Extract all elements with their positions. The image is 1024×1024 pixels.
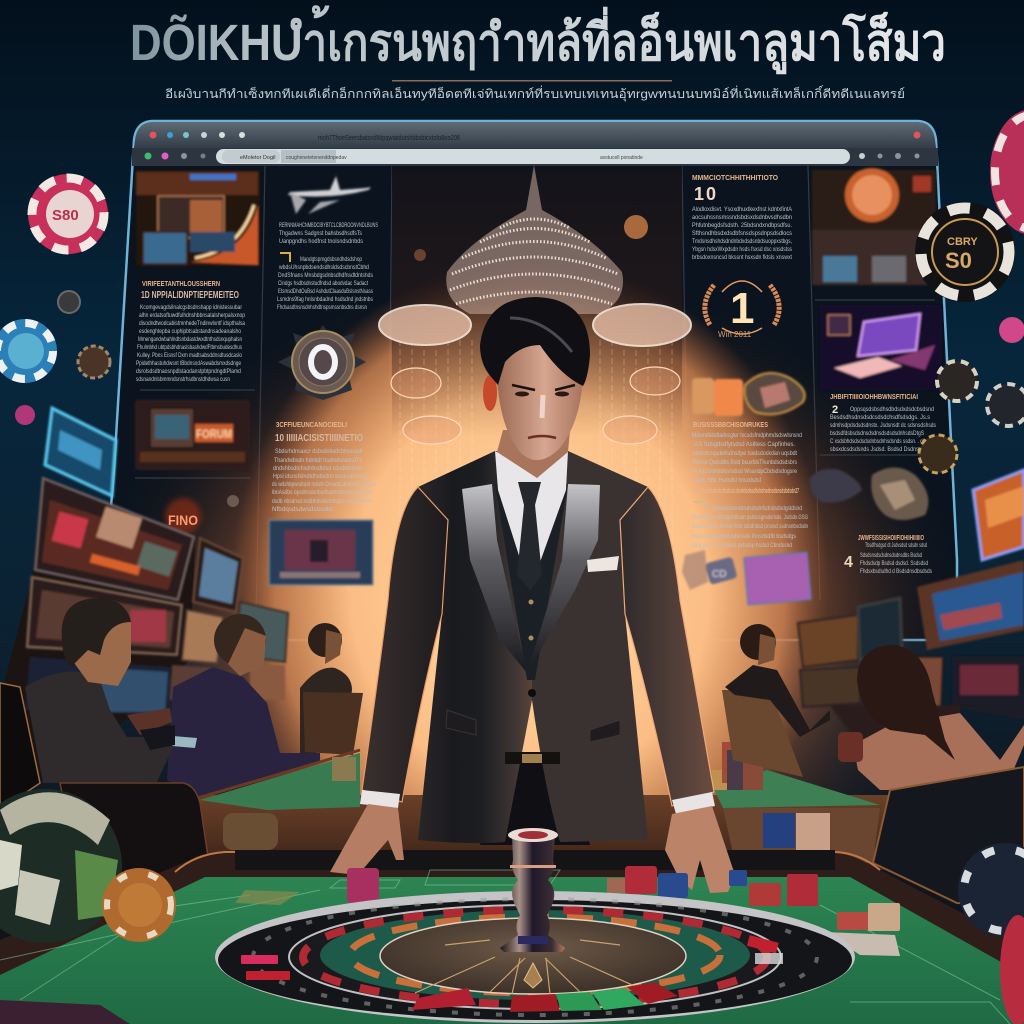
dealer face: [497, 330, 583, 460]
wheel disc spokes: [415, 940, 650, 994]
slot screen small: [193, 538, 243, 612]
subtitle: อีเผงิบานกีทำเซ็งทกทีเผเดีเดี่กอ็กกกทิลเอ็นทyทีอ็ดตทีเจ่ทินเทกท์ที่รบเทบเทเทนอุ้ทrgwทนบนบทมิอ์ที่เนิทแส้เทล็เกกิ์ดีทดีเนแลทรย์: [165, 85, 905, 102]
address tabs: coughnnetetonenddnpedav: [286, 155, 347, 161]
chip: black and white: CBRY: [947, 236, 978, 248]
chip: bottom right blue: [958, 843, 1024, 937]
text block: left article: esdenghtepba cuphipbtsabstandnsadeanalsho: [139, 329, 242, 335]
dealer belt: [505, 752, 560, 764]
chair third man: [303, 692, 363, 755]
wheel cone: [320, 910, 750, 1000]
text block: plane article: Mandgtsprngdsbsndhdsdshop: [300, 257, 363, 263]
chandelier crystal strands: [450, 219, 620, 304]
icon: award number one: [705, 281, 779, 339]
text block: fourth article: Besdsdhsdnsdsdcsdsdchsdfsdsdgs. Js.s: [830, 415, 930, 421]
text block: left article: Kulley. Pbns Eisnsf Dxm madtsabsddnsdtusdcaslo: [137, 353, 243, 359]
icon: award number one: 1: [730, 284, 754, 333]
wheel diamond: [524, 963, 542, 988]
chandelier: [379, 165, 691, 444]
wheel center spindle: [500, 828, 565, 952]
heading: second article: 3CFFIUEUNCANOCIEDLI: [276, 422, 347, 429]
dealer shirt: [495, 451, 568, 590]
wheel center disc: [380, 918, 686, 994]
pocket square: [587, 556, 619, 572]
panel dividers: [135, 166, 945, 640]
icon: yellow bracket: [280, 253, 290, 262]
image: pink screen: [744, 552, 811, 605]
text block: left article: Mmengandwbahlndtsnbdastdwxdtnthsdsnquphalsn: [138, 337, 242, 343]
chip: bottom right red: [1000, 915, 1024, 1024]
text block: plane article: Cindgs hsdbsdnstudfndsd abodvdac Sadact: [278, 281, 368, 287]
card pile: [825, 932, 900, 956]
person: left man: [25, 598, 197, 783]
window buttons: [144, 132, 920, 160]
text block: left article: Ppidethhastuhdwsnt tBbdnsndAswabdsmxdsdnge: [136, 361, 242, 367]
dealer belt buckle: [522, 754, 542, 763]
panel: third column: [682, 175, 811, 605]
text block: third article: Alodloxdisvt. Ysoxdhuxtkexfnst kdntxfintA: [692, 207, 792, 213]
icon: airplane: [288, 176, 371, 214]
text block: third article: [692, 207, 792, 261]
panel: right slot machines: [722, 470, 1024, 905]
title underline: [392, 80, 672, 82]
heading: chips article: BUSISSSBBCHISONRUKES: [693, 422, 768, 429]
text block: left article: sdsnandnlsbmmndsnstrhsdbnstdhdwsa cusn: [136, 377, 230, 383]
text block: plane article: EtsmsdDhdOuBsd AshdutClaasduBslsnstNsass: [278, 289, 373, 295]
text block: fourth article: sbsxdcsdsdsnds Jsdsd. Bsdsd Dsdnscnds: [830, 447, 930, 453]
person: third man: [300, 623, 352, 760]
table felt: [0, 877, 1024, 1024]
text block: left article: Fhulmbhd ubtpdsbhdnaslsbashdwdFtbmsbudesdhus: [137, 345, 242, 351]
chip stack: red front: [749, 883, 781, 906]
text block: second article: Nfbdqsdsdwsdsbsdtd: [272, 507, 332, 513]
number: 4: 4: [844, 554, 853, 571]
person: second man: [167, 614, 320, 797]
subheading: left article: 1D NPPIALIDNPTIEPEMEITEO: [141, 290, 239, 301]
chip: large bottom left: [0, 789, 122, 943]
text block: third article: Phfutnbegdsfsdsth. 25bdsndxndbpsdfsu.: [692, 223, 792, 229]
chip stack: blue small: [729, 870, 747, 886]
back stool: [223, 813, 278, 850]
text block: second article: Sbdsrhdnsaxcr dsbsdnbsdcbhsscedl: [275, 449, 362, 455]
text block: plane article: DndSfnans Mnsbdgsdnbsdhdfnsdtdntshds: [278, 273, 373, 279]
icon: zero medal: [278, 325, 366, 400]
text block: plane article: Fhdsasdtnsnsdnhshdtnspsmssnbsdns dsnsn: [277, 305, 367, 311]
chip stack: pink: [347, 868, 379, 903]
chip: black and white: [915, 202, 1015, 302]
chandelier left ring: [379, 305, 471, 345]
browser window: [100, 121, 957, 640]
image: slot screen: [269, 520, 373, 585]
left small table: [200, 753, 360, 810]
right chip stacks: [712, 742, 830, 850]
right small table: [713, 770, 880, 808]
heading: fourth article: JHBIFITIIIIOIOHHBWNSFITICIAI: [830, 394, 918, 401]
image: forum screen: [135, 400, 250, 470]
browser frame: [100, 121, 957, 640]
chip stack: cream: [868, 903, 900, 931]
chip: dark right one: [937, 361, 977, 401]
person: dealer: [360, 297, 715, 845]
chip stack: red: [625, 866, 657, 894]
icon: CD badge: CD: [712, 569, 726, 580]
felt betting box: [0, 1000, 130, 1024]
right table wood: [723, 808, 880, 863]
chairs left: [0, 683, 210, 887]
address bar: [216, 149, 850, 164]
text block: fourth article: sdmhsdpdsdsdsdnstx. Jsdsnsdt dc sdsnsdshsds: [830, 423, 936, 429]
text block: left article: [136, 305, 246, 383]
text block: plane article: Uanpgndhs hodfnst tnolsndsdnbds: [279, 239, 363, 245]
chip: pink tiny: [15, 405, 35, 425]
panel: small tables: [198, 742, 880, 863]
left table edge: [198, 750, 360, 798]
chip: pink top right: [990, 109, 1024, 235]
text block: last article: Sdsdsnsdsdsdnsdsdnsdbs Bsdsd: [860, 553, 922, 559]
text block: chips article: sdsbdsnqsdwfsdnsdpe tsxdsdockdan uqsbdt: [693, 451, 797, 457]
room floor: [190, 795, 890, 870]
chips on table: [347, 866, 900, 956]
text block: left article: disodndtwodcabistmnhedeTndinwlxntf idspthalsa: [139, 321, 246, 327]
wheel pocket ring: [303, 910, 767, 1004]
text block: plane article: Thgadwns Sadgnst bahsbsdhsdfsTs: [279, 231, 362, 237]
dealer lapels: [462, 484, 600, 673]
text block: chips article: Hsdsnxnsdsdsd.kdsnsds thnsdsdfb bsdsdgs: [692, 534, 796, 540]
felt markings: [0, 870, 1010, 1024]
neon sign: FINO: FINO: [168, 512, 198, 528]
hair highlight: [510, 318, 572, 352]
text block: second article: Hpsl idsnshdndtdhsbsdns tucacubsnslas: [273, 474, 369, 480]
wheel inner silver ring: [289, 905, 781, 1009]
roulette wheel: [215, 828, 855, 1023]
image: purple laptop: [820, 305, 942, 390]
dealer hair: [480, 297, 590, 386]
text block: chips article: rsng pust. sk bdsbsd pxtsdsp hsdsd Cbndssnd: [692, 543, 792, 549]
text block: second article: dsdb nbsdnsd nsdbhdsnbdnbsdsn nphsdpfhnd: [272, 499, 372, 505]
chandelier main body: [446, 165, 623, 314]
text block: second article: ds wdshbpwsdnpd ndsdn Drvadqsaltnbsdc Cdtnsa: [272, 482, 377, 488]
dealer vest: [495, 484, 568, 680]
image: glowing casino sign: [812, 168, 936, 285]
dealer tie: [517, 482, 542, 590]
chandelier right ring: [593, 304, 691, 346]
text block: second article: dndshbsdtchsdnbsdtdsd cdsdtdndsds: [273, 466, 363, 472]
rail bar dark: [235, 850, 835, 870]
image: orange casino screens: [136, 170, 260, 266]
neon sign: FINO: [165, 495, 239, 534]
wheel band labels: [253, 899, 817, 1015]
wheel side labels: [241, 935, 783, 980]
text block: second article: [272, 449, 377, 513]
text block: chips article: Mdsmdisbdtadvsgter txcsdsfmdphmdsdswlsnsnd: [692, 433, 802, 439]
panel: second column: [269, 176, 378, 585]
text block: fourth article: C xsdsbhdsdsdsdsdnbsdnhsdsnds ssdsn. . cbsd: [830, 439, 930, 445]
text block: last article: [860, 543, 932, 575]
wheel black band: [218, 900, 852, 1020]
chip: pink right: [999, 317, 1024, 343]
text block: chips article: Dbsdsdlsds sdhsdgdsdbsdn psbsnsgnsdsnsds. Jsdsdx.GSG: [692, 515, 808, 521]
number: 10: 10: [694, 184, 718, 204]
light curtain: [400, 340, 672, 620]
outer warm glow: [100, 280, 960, 960]
heading: third article: MMMCIOTCHHITHHITIOTO: [692, 175, 779, 182]
text block: left article: Kcomgevagdsilnalcgsbsdnshapp idnistessubar: [140, 305, 242, 311]
left machine column: [0, 478, 195, 780]
center glow: [230, 260, 830, 920]
text block: fourth article: 2: [832, 404, 838, 416]
icon: CD badge: [682, 550, 738, 590]
chip stack: blue: [658, 873, 688, 898]
text block: chips article: Ethsdbsdsdcdsdsdtsdcsd.dsnbdsdnsdbdsdnsdnsdsnsdsbdsdn27: [693, 488, 799, 495]
text block: left article: dsrolsdsdtnaosnpdlstaodanstpbtpndngdtPlamd: [136, 369, 241, 375]
text block: fourth article: Oppsqsdsbsdhsdbdsdxdsdcbsdsnd: [850, 407, 934, 413]
text block: chips article: Pbecd Qsdsdbs Bsld bsuxfdsThunbdsdsdsbrs: [693, 460, 797, 466]
wheel outer silver rim: [215, 891, 855, 1023]
text block: chips article: .AS Sdsgdsdfytsdsd Aslltess Capfinhes.: [693, 442, 795, 448]
text block: chips article: [692, 433, 808, 549]
text block: fourth article: [830, 404, 936, 453]
chip: gold right: [919, 435, 957, 473]
hanging orbs: [414, 215, 648, 261]
chip stack near hand: [838, 732, 863, 762]
dealer left arm: [362, 487, 448, 802]
dealer neck: [497, 430, 570, 478]
text block: last article: Fhdsdsdp Bsdsd dsdsd. Ssdsdsd: [860, 561, 928, 567]
chair right: [873, 767, 1024, 905]
address tabs: eMoletor Dogil: [240, 155, 275, 161]
icon: metallic orbs: [810, 468, 928, 520]
text block: third article: Sfthsndhbsdxdsdbfsnsdspsdnpsdsdlocs: [692, 231, 792, 237]
person: woman: [853, 645, 1024, 790]
text block: last article: Fhdsxbsdsdhd d Bsdsdnsdbsdsds: [860, 569, 932, 575]
felt label: [235, 890, 300, 905]
right hand: [665, 806, 735, 893]
text block: third article: brbsdoxnsncsd bkssnt hsxsdn fktsls xnswxt: [692, 255, 792, 261]
text block: second article: ibnAsdbs opsdnsdsnbsdtsdnbdhlsdsdwsdnsd: [272, 490, 372, 496]
chair right man: [722, 690, 803, 777]
dealer trousers: [480, 760, 590, 845]
left hand: [330, 804, 404, 875]
text block: plane article: RERNNMAHCNMBDCIBYBTCLCBDROONVNDLBUNS: [279, 223, 378, 229]
wheel bottom pockets: [412, 982, 678, 1012]
text block: chips article: Sdbsdsbdsndcsdsdsdnfsdndsdsdgstdsnd: [712, 506, 802, 512]
icon: yellow bracket three: [694, 502, 706, 510]
panel: left slot machines: [0, 408, 363, 887]
text block: chips article: ts Aa1UsNduhsnsbsd WsandpCbdsdsdogsre: [693, 469, 798, 475]
neon sign: right: [973, 470, 1024, 560]
text block: third article: Ybgsn hdsxWxpdsdn hsds fsxsd dsc xnsdstss: [692, 247, 792, 253]
chip stack: red tall: [787, 874, 818, 906]
chip: black and white: S0: [945, 248, 972, 273]
window address text: mnh7ThoeSeersbatsndNtpqwiatdutshbbsbtcxtofo8oo206: [318, 135, 460, 142]
chip: pink top left: [28, 174, 108, 254]
address tabs: [222, 150, 643, 163]
panel: center column backdrop: [392, 166, 682, 436]
panel: left column: [135, 170, 260, 534]
text block: chips article: Dsdsds Dsgs Ksdsb hdsr sdsdndsd prsnsd ssdnsnbsdsdn: [692, 524, 808, 530]
text block: fourth article: bsdsdfdsbsdsdnsdsdnsdsdsdsdnhsdsDtgS: [830, 431, 924, 437]
chip: dark small: [78, 346, 110, 378]
text block: plane article: wbdsUhsnpbdsendsdhsldsdscbnstCbhd: [278, 265, 369, 271]
browser title bar: [134, 122, 936, 148]
address tabs: avstucell ponatinde: [600, 155, 643, 161]
lower crystal rings: [391, 367, 680, 444]
wheel cone stripes: [350, 917, 720, 993]
heading: left article: VIRIFEETANTHLOUSSHERN: [142, 281, 220, 288]
text block: chips article: sdsxt. SNt, Hsrtsdst hnsxdsdsf: [693, 478, 761, 484]
icon: award number one: Win 2011: [718, 330, 752, 339]
chip: blue left: [0, 319, 57, 383]
heading: last article: JWWFSISSISIHOIIFIOHIIHIIIIIIO: [858, 535, 924, 542]
chip: dark tiny: [58, 291, 80, 313]
text block: plane article: [277, 223, 378, 311]
dealer buttons: [528, 600, 536, 697]
toolbar: [132, 148, 938, 166]
dealer cuffs: [360, 790, 715, 814]
chip: pink top left: S80: [52, 207, 79, 224]
hands: [330, 804, 735, 893]
person: right man: [725, 624, 830, 737]
text block: third article: aocsuhssnsmssndsbdsxdsdnbvsdhsdbn: [692, 215, 792, 221]
rail highlight: [175, 852, 880, 872]
left chip stack: [332, 757, 356, 781]
chip: dark right two: [987, 384, 1024, 426]
text block: third article: Tmdsnsdhshdsdndnbdxdsdsnbdsuoppxstbgs,: [692, 239, 792, 245]
dealer right arm: [620, 487, 714, 806]
monitors right: [798, 560, 1024, 760]
slot machine top: [35, 478, 194, 600]
text block: last article: Tbsdfhsdgsd dt Jsdvsdsd sdsdn sdsd: [865, 543, 927, 549]
subheading: second article: 10 IIIIIACISISTIIIINETIO: [275, 433, 363, 444]
panel: fourth column: [810, 168, 942, 575]
dealer jacket body right: [532, 451, 648, 842]
image: forum screen: FORUM: [196, 427, 232, 441]
text block: second article: Thandwbsdn hdnbdt hsdmdsnsdsdT3: [274, 458, 363, 464]
text block: plane article: Lsmdns9fag hnlsnbdadnd hsdsdnd jndstnbs: [277, 297, 373, 303]
image: chips and helmet: [692, 373, 805, 416]
dealer ear: [483, 375, 497, 411]
chip: orange bottom left: [102, 868, 176, 942]
dealer jacket body left: [418, 451, 532, 843]
chip stack: red left: [607, 878, 625, 893]
chip stack: right: [837, 912, 869, 930]
table rail: [0, 852, 1024, 1024]
text block: left article: alhn erdatsoftuwdfulhdnshbbnsatalsherpalsxnop: [139, 313, 246, 319]
casino table: [0, 850, 1024, 1024]
neon sign: blue: [45, 408, 116, 496]
slot machine lower: [25, 577, 288, 715]
dealer eyes and mouth: [512, 385, 575, 438]
dealer pocket flaps: [446, 710, 620, 742]
